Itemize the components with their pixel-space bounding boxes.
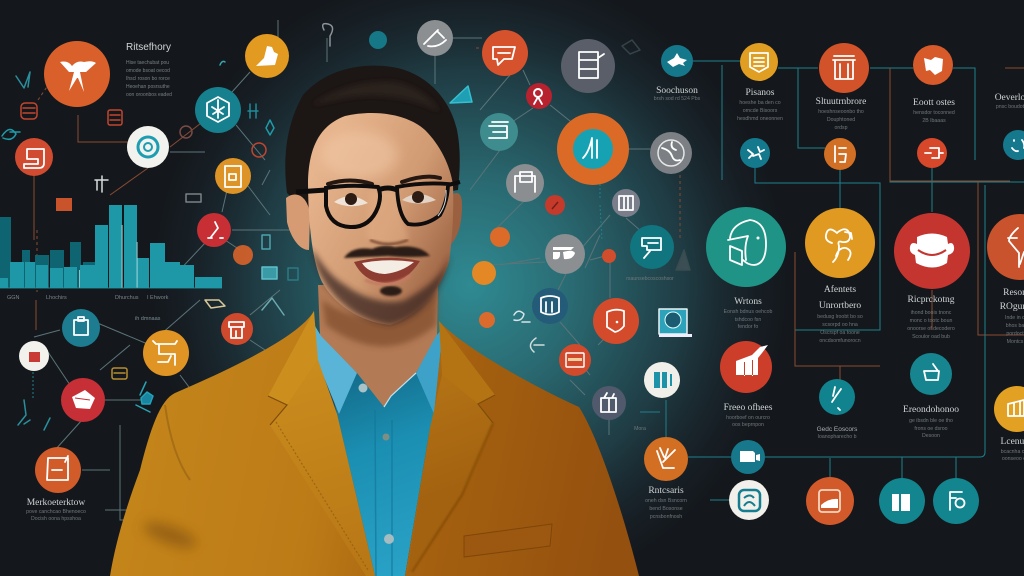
moustache: [344, 245, 430, 258]
label: reasons: bhos ba: [1006, 323, 1024, 329]
icon: orange tree: [44, 41, 110, 107]
label: grade: Gedc Eoscors: [817, 426, 858, 433]
label: research sites: [645, 486, 687, 520]
label: freo offices: hoorboef on ourcro: [726, 415, 770, 421]
label: repurchasing: Ricprckotng: [908, 295, 955, 305]
icon: orange landscape: [806, 477, 854, 525]
icon: teal camera: [731, 440, 765, 474]
lower lip: [365, 276, 410, 284]
dot: orange: [479, 312, 495, 328]
panel: labels and descriptions: [26, 86, 1024, 522]
icon: teal network: [740, 138, 770, 168]
icon: grey gift: [592, 386, 626, 420]
shirt body: [320, 340, 444, 576]
label: situation: Sltuutrnbrore: [816, 97, 866, 107]
label: fisanos: orncde Bisoors: [743, 108, 778, 114]
ear left: [286, 195, 310, 250]
icon: red feather: [197, 213, 231, 247]
chart axis labels: [7, 295, 169, 322]
label: situation: ordsp: [835, 125, 848, 131]
label: marketing left: Merkoeterktow: [27, 498, 85, 508]
label: breeder: Desoon: [922, 433, 940, 439]
neck shadow: [322, 290, 438, 346]
label: writers: Eonsh bdnus oehcob: [724, 309, 772, 315]
face: [308, 113, 453, 325]
panel: research heading text: omode bsoat oecod: [126, 68, 170, 74]
nose: [367, 190, 409, 245]
icon: grey frame: [506, 164, 544, 202]
label: overlo: pnsc boudot: [996, 104, 1024, 110]
icon: grey glasses: [545, 234, 585, 274]
left collar lapel upper: [268, 311, 318, 405]
ear right: [449, 193, 462, 246]
label: situation: Douphtoned: [827, 117, 855, 123]
label: marketing: Afentets: [824, 284, 856, 295]
label: fisanos: [737, 88, 783, 122]
chart axis labels: Lhochirs: [46, 295, 67, 301]
jacket right: [405, 321, 639, 576]
label: research sites: pcnsbonfnosh: [650, 514, 682, 520]
pocket: [464, 524, 552, 557]
panel: research heading text: Hise taechubat pou: [126, 60, 169, 66]
label: research sites: bend Bosonse: [649, 506, 683, 512]
label: screens: [626, 276, 674, 432]
icon: teal clipboard: [62, 309, 100, 347]
person: [110, 66, 639, 576]
icon: gold map: [245, 34, 289, 78]
label: cool ester: 2B Ibaaas: [922, 118, 946, 124]
icon: red envelope: [61, 378, 105, 422]
chart axis labels: GGN: [7, 295, 20, 301]
beard: [311, 248, 450, 325]
label: cool ester: hensdor toconned: [913, 110, 955, 116]
label: marketing left: [26, 498, 86, 522]
label: research sites: Rntcsaris: [648, 486, 684, 496]
left lapel: [270, 360, 375, 576]
panel: right column icons: [661, 43, 1024, 525]
label: fisanos: hoeshe ba den co: [739, 100, 781, 106]
label: screens: Mora: [634, 426, 646, 432]
icon: red list: [559, 344, 591, 376]
label: writers: fendor fo: [738, 324, 758, 330]
right lapel: [407, 375, 493, 576]
icon: orange map: [913, 45, 953, 85]
eye right: [402, 191, 436, 204]
label: soochurs: Soochuson: [656, 86, 698, 96]
panel: left cluster icons: [15, 34, 289, 493]
collar inner edge: [384, 373, 416, 407]
label: marketing: [817, 284, 863, 344]
label: breeder: frons oe dsroo: [914, 426, 948, 432]
icon: red small: [545, 195, 565, 215]
label: writers: Wrtons: [734, 297, 762, 307]
bar chart: [0, 205, 222, 288]
label: situation: [816, 97, 866, 131]
label: fisanos: hesdhmd oneonnen: [737, 116, 783, 122]
shirt placket: [375, 410, 392, 576]
label: freo offices: [724, 402, 773, 428]
lapel edge shadow right: [412, 423, 493, 572]
label: marketing: Oscrspf oa toone: [820, 330, 860, 336]
icon: large orange ring with AI: [557, 113, 629, 185]
panel: research heading text: [126, 42, 172, 98]
icon: orange chart arrow: [644, 437, 688, 481]
label: marketing left: Docish oona hpsshoa: [31, 516, 81, 522]
eye left: [334, 193, 368, 206]
icon: teal partial: [1003, 130, 1024, 160]
label: marketing: oncdsomfunorocn: [819, 338, 861, 344]
icon: big gold swirl: [805, 208, 875, 278]
label: grade: Ioanopharecho b: [818, 434, 857, 440]
icon: big orange body: [987, 214, 1024, 280]
icon: teal chat: [480, 113, 518, 151]
panel: research heading text: Ritsefhory: [126, 42, 171, 53]
label: breeder: [903, 405, 959, 439]
label: cool ester: [913, 98, 955, 124]
label: freo offices: oos beprnpon: [732, 422, 764, 428]
panel: centre cluster icons: [417, 20, 692, 481]
label: repurchasing: monc o tootc boun: [910, 318, 952, 324]
lapel stitching left: [276, 422, 368, 570]
label: marketing: Unrortbero: [819, 301, 861, 311]
icon: grey brain: [650, 132, 692, 174]
icon: orange linked: [917, 138, 947, 168]
label: breeder: Ereondohonoo: [903, 405, 959, 415]
icon: red ribbon: [526, 83, 552, 109]
label: writers: [724, 297, 772, 330]
label: freo offices: Freeo ofhees: [724, 402, 773, 413]
notch lines: [268, 395, 495, 425]
icon: gold document: [740, 43, 778, 81]
panel: research heading text: Ihscl roson bo rorce: [126, 76, 170, 82]
chart axis labels: I Ehwork: [147, 295, 169, 301]
icon: red cup: [221, 313, 253, 345]
icon: grey columns: [612, 189, 640, 217]
sleeve crease: [141, 517, 199, 553]
label: repurchasing: ihond boois tnonc: [911, 310, 952, 316]
nose base: [370, 240, 408, 244]
panel: research heading text: Heoehan posrsuthe: [126, 84, 170, 90]
icon: teal hexagon: [195, 87, 241, 133]
label: breeder: ge ibsdn ble oe tho: [909, 418, 953, 424]
label: marketing: bedusg lroobt bo so: [817, 314, 863, 320]
icon: blue jar: [532, 288, 568, 324]
goatee: [380, 286, 402, 296]
icon: big teal head: [706, 207, 786, 287]
label: cool ester: Eoott ostes: [913, 98, 955, 108]
icon: teal text tile: [933, 478, 979, 524]
icon: white columns: [644, 362, 680, 398]
label: repurchasing: Scoulor oad bub: [912, 334, 950, 340]
label: loanur: [1001, 437, 1024, 462]
shirt collar right: [416, 328, 443, 414]
icon: grey printer: [561, 39, 615, 93]
dot: orange: [233, 245, 253, 265]
icon: white circle ring: [127, 126, 169, 168]
glasses: [296, 182, 460, 227]
label: grade: [817, 426, 858, 440]
dot: orange gold: [472, 261, 496, 285]
icon: teal screen: [630, 225, 674, 269]
label: soochurs: [654, 86, 701, 102]
right collar lapel upper: [439, 321, 495, 404]
icon: red document: [15, 138, 53, 176]
teeth: [362, 260, 414, 274]
label: reasons: Montcs: [1007, 339, 1024, 345]
icon: big red sofa: [894, 213, 970, 289]
hair back: [285, 66, 460, 215]
label: reasons: [1000, 288, 1024, 345]
neck: [318, 285, 438, 407]
label: reasons: pordoct: [1006, 331, 1024, 337]
shirt button bottom: [384, 534, 394, 544]
icon: orange note: [35, 447, 81, 493]
shirt button middle: [382, 434, 390, 440]
icon: teal fish: [661, 45, 693, 77]
jacket left: [110, 311, 375, 576]
hair sheen: [312, 82, 440, 112]
icon: white bag: [19, 341, 49, 371]
icon: orange gate: [819, 43, 869, 93]
label: fisanos: Pisanos: [745, 88, 775, 98]
icon: gold book: [215, 158, 251, 194]
forehead highlight: [322, 131, 398, 179]
label: marketing: scsorpd oo hna: [822, 322, 858, 328]
icon: teal pen: [819, 379, 855, 415]
icon: white face tile: [729, 480, 769, 520]
label: soochurs: brsh sod rd 524 Pbs: [654, 96, 701, 102]
icon: red factory: [720, 341, 772, 393]
label: screens: rsaunsebcoscoshsor: [626, 276, 674, 282]
label: research sites: oneh dsn Bsncorn: [645, 498, 687, 504]
dot: orange: [490, 227, 510, 247]
label: repurchasing: onoorse of decodero: [907, 326, 955, 332]
shirt collar left: [312, 321, 357, 414]
icon: orange tag: [482, 30, 528, 76]
chart axis labels: ih dmnaas: [135, 316, 161, 322]
eyebrows: [328, 177, 440, 184]
icon: red shield: [593, 298, 639, 344]
arm shadow: [165, 405, 190, 480]
chart axis labels: Dhurchus: [115, 295, 139, 301]
icon: teal basket: [910, 353, 952, 395]
mouth: [354, 258, 420, 283]
label: writers: tshdcoo fsn: [735, 317, 761, 323]
icon: gold machine: [143, 330, 189, 376]
label: situation: hoeshnseoonbo tho: [818, 109, 864, 115]
panel: research heading text: oon oroonbos eaded: [126, 92, 172, 98]
icon: grey shoe: [417, 20, 453, 56]
icon: gold box: [994, 386, 1024, 432]
label: marketing left: pove canchcao Bhenoeco: [26, 509, 86, 515]
label: repurchasing: [907, 295, 955, 340]
label: overlo: [995, 93, 1024, 110]
icon: orange split: [824, 138, 856, 170]
small loose icons left: [2, 24, 692, 430]
shirt button top: [358, 384, 368, 392]
icon: teal tile: [879, 478, 925, 524]
dot: red: [602, 249, 616, 263]
